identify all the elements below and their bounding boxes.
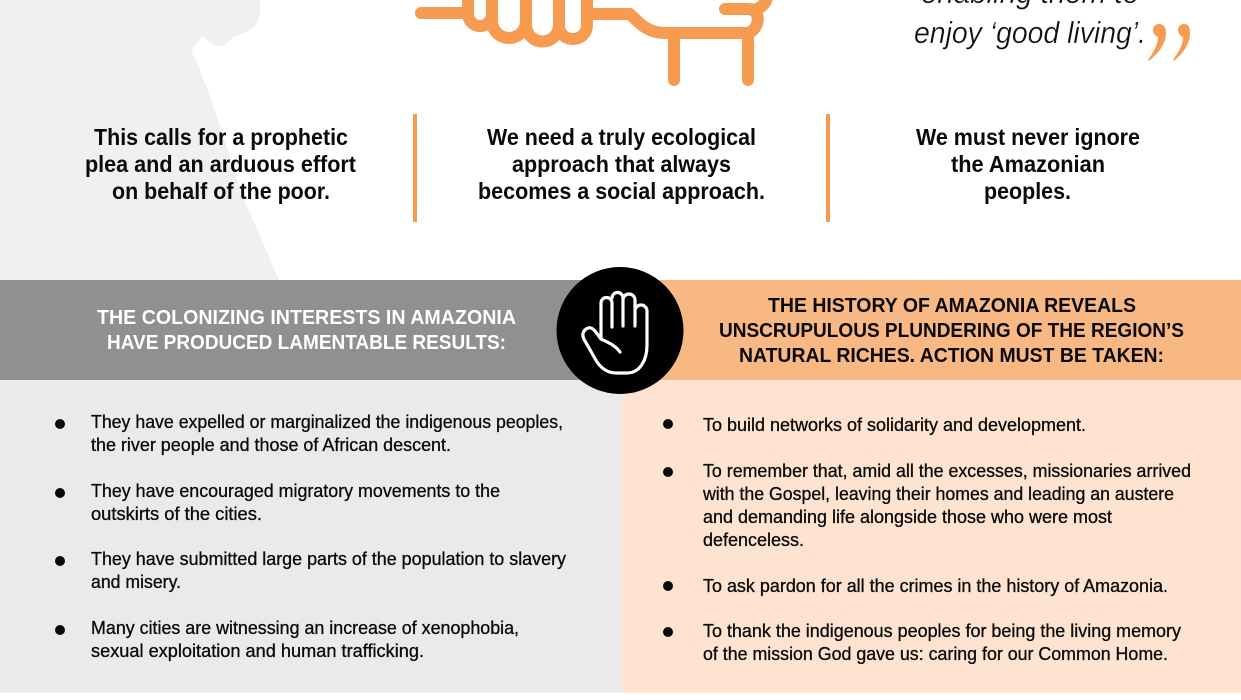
bullet list right <box>663 415 1191 664</box>
bullet list right: defenceless. <box>703 530 804 550</box>
text: prophetic plea: plea and an arduous effort <box>85 151 356 177</box>
divider left <box>413 114 417 222</box>
bullet list left: sexual exploitation and human trafficking. <box>91 641 424 661</box>
bullet list left: They have submitted large parts of the population to slavery <box>91 549 566 569</box>
panel: colonizing interests <box>0 280 622 692</box>
icon: closing quotation marks <box>1148 24 1190 61</box>
bullet list left: Many cities are witnessing an increase of xenophobia, <box>91 618 519 638</box>
text: prophetic plea: This calls for a prophetic <box>94 124 348 150</box>
bullet list right: of the mission God gave us: caring for our Common Home. <box>703 644 1168 664</box>
panel background left <box>0 380 622 692</box>
header text right: NATURAL RICHES. ACTION MUST BE TAKEN: <box>739 345 1164 367</box>
bullet list right: To ask pardon for all the crimes in the history of Amazonia. <box>703 576 1168 596</box>
bullet list left: and misery. <box>91 572 181 592</box>
header text right: UNSCRUPULOUS PLUNDERING OF THE REGION’S <box>719 320 1184 342</box>
grey silhouette background <box>0 0 279 280</box>
bullet list left: outskirts of the cities. <box>91 504 262 524</box>
icon: open hand in black circle <box>556 267 684 394</box>
text: ecological approach: approach that always <box>512 151 731 177</box>
bullet list left: the river people and those of African descent. <box>91 435 451 455</box>
header band right <box>621 280 1241 380</box>
bullet list left <box>55 412 566 661</box>
divider right <box>826 114 830 222</box>
text: Amazonian peoples <box>916 124 1140 204</box>
text: Amazonian peoples: peoples. <box>984 178 1071 204</box>
text: ecological approach <box>478 124 765 204</box>
header text right <box>719 295 1184 367</box>
bullet list right: To thank the indigenous peoples for being the living memory <box>703 621 1181 641</box>
icon: orange hand holding rope <box>421 0 767 80</box>
panel background right <box>622 380 1241 692</box>
bullet list right: and demanding life alongside those who were most <box>703 507 1112 527</box>
bullet list right: with the Gospel, leaving their homes and leading an austere <box>702 484 1174 504</box>
pull quote <box>914 0 1146 50</box>
pull quote: enjoy ‘good living’. <box>914 15 1146 50</box>
text: prophetic plea: on behalf of the poor. <box>112 178 330 204</box>
text: ecological approach: becomes a social approach. <box>478 178 765 204</box>
bullet list left: They have encouraged migratory movements to the <box>91 481 500 501</box>
text: Amazonian peoples: We must never ignore <box>916 124 1140 150</box>
text: ecological approach: We need a truly ecological <box>487 124 756 150</box>
header text left: THE COLONIZING INTERESTS IN AMAZONIA <box>97 307 516 329</box>
header text left <box>97 307 516 354</box>
header text left: HAVE PRODUCED LAMENTABLE RESULTS: <box>107 332 506 354</box>
header text right: THE HISTORY OF AMAZONIA REVEALS <box>768 295 1136 317</box>
text: Amazonian peoples: the Amazonian <box>951 151 1105 177</box>
bullet list left: They have expelled or marginalized the indigenous peoples, <box>91 412 563 432</box>
bullet list right: To remember that, amid all the excesses, missionaries arrived <box>703 461 1191 481</box>
panel: action must be taken <box>621 280 1241 692</box>
header band left <box>0 280 621 380</box>
text: prophetic plea <box>85 124 356 204</box>
bullet list right: To build networks of solidarity and development. <box>703 415 1086 435</box>
